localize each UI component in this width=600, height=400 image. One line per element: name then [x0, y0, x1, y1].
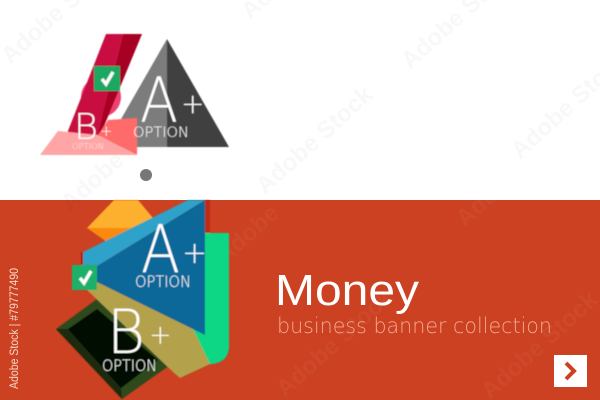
- green J shape: [193, 233, 229, 364]
- chevron: [566, 363, 574, 379]
- black diamond inner: [68, 309, 158, 388]
- red band: dark side: [97, 34, 142, 136]
- white letter A: A: [140, 64, 178, 137]
- white plus sign: +: [181, 87, 204, 120]
- orange diamond: yellow top: [87, 200, 153, 228]
- watermarks on white: Adobe Stock: [56, 98, 184, 216]
- green check badge: [94, 66, 120, 91]
- watermarks on orange: [211, 114, 600, 400]
- plus sign for A: +: [182, 236, 207, 271]
- pink circle: [81, 77, 121, 117]
- black diamond lower bevel: [56, 329, 122, 399]
- watermarks on orange: Adobe Stock: [271, 284, 399, 400]
- heading: Money: Money: [275, 266, 419, 315]
- light blue strip: [83, 200, 205, 266]
- watermarks on orange: Adobe: [211, 199, 285, 269]
- plus sign for B: +: [149, 320, 172, 351]
- grey triangle: left half: [105, 39, 167, 147]
- watermarks on orange: Adobe Stock: [451, 114, 579, 232]
- letter A: A: [141, 211, 180, 288]
- salmon shape: [98, 118, 137, 155]
- subheading: business banner collection: [277, 314, 552, 338]
- orange bottom banner panel: [0, 200, 600, 400]
- OPTION label for A: OPTION: [133, 125, 189, 141]
- blue triangle: [97, 200, 205, 335]
- next arrow button: [554, 355, 587, 387]
- OPTION label for B: OPTION: [102, 356, 157, 375]
- side credit text: Adobe Stock | #79777490: [9, 268, 21, 389]
- top illustration: A+ and B+ options: [40, 34, 229, 155]
- check mark: [102, 72, 113, 84]
- letter B: B: [107, 297, 145, 368]
- bottom illustration: A+ and B+ options: [56, 200, 229, 399]
- OPTION label for A: OPTION: [135, 272, 191, 291]
- white top panel: [0, 0, 600, 200]
- light pink trapezoid: [40, 131, 137, 155]
- grey triangle: right half: [167, 39, 229, 147]
- OPTION label for B: OPTION: [72, 142, 104, 151]
- red band: light side: [66, 34, 123, 136]
- white letter B: B: [74, 107, 98, 148]
- check mark: [80, 271, 91, 283]
- orange diamond: deep lower: [87, 228, 139, 242]
- shadow behind blue shape: [81, 252, 96, 268]
- watermarks on white: [0, 0, 600, 216]
- olive band: [87, 282, 210, 378]
- green check badge: [72, 265, 97, 290]
- black diamond outer bevel: [56, 299, 170, 399]
- pagination dot: [140, 169, 152, 181]
- plus sign for B: +: [100, 122, 113, 140]
- watermarks on white: Adobe Stock: [251, 81, 379, 199]
